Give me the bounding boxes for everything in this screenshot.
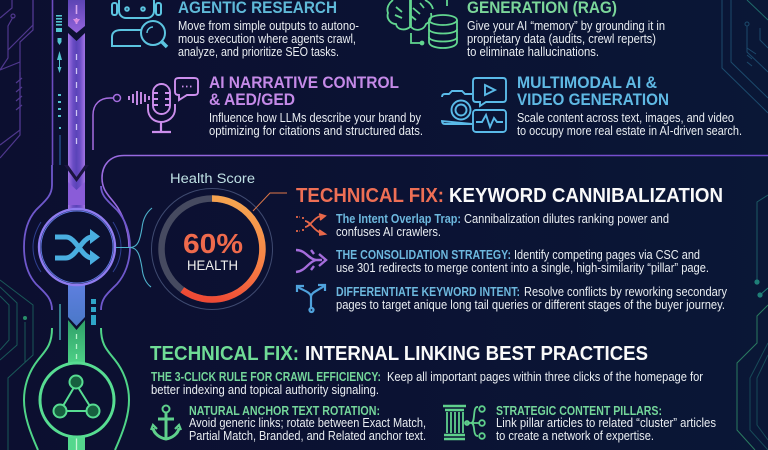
body text xyxy=(178,18,359,59)
circuit traces: upper left xyxy=(0,0,33,158)
heading: VIDEO GENERATION xyxy=(517,91,669,109)
icon: pillar with branches xyxy=(443,406,485,439)
heading: & AED/GED xyxy=(209,91,295,109)
gauge value arc xyxy=(182,198,262,299)
item: consolidation strategy: Identify competing pages via CSC and xyxy=(514,247,700,262)
icon: diverging arrows xyxy=(297,285,325,312)
panel: agentic research xyxy=(112,0,359,59)
heading: AI NARRATIVE CONTROL xyxy=(209,74,399,92)
body text xyxy=(467,18,665,59)
section divider xyxy=(150,329,730,331)
3-click rule: THE 3-CLICK RULE FOR CRAWL EFFICIENCY: xyxy=(151,369,381,384)
3-click rule: better indexing and topical authority signaling. xyxy=(151,382,379,397)
side rail: purple left line xyxy=(52,0,54,165)
item: differentiate intent: Resolve conflicts by reworking secondary xyxy=(524,284,727,299)
chart: health score gauge xyxy=(152,171,272,310)
body text xyxy=(209,110,423,138)
title xyxy=(296,184,723,207)
body text: analyze, and prioritize SEO tasks. xyxy=(178,44,339,59)
connector: gauge to title xyxy=(253,193,287,211)
body text: mous execution where agents crawl, xyxy=(178,31,356,46)
title: KEYWORD CANNIBALIZATION xyxy=(449,184,723,207)
gauge caption: HEALTH xyxy=(187,258,238,273)
body text: proprietary data (audits, crewl reperts) xyxy=(467,31,656,46)
body text: Move from simple outputs to autono- xyxy=(178,18,359,33)
panel: RAG generation xyxy=(387,0,665,59)
icon: camera, video bubble, waveform xyxy=(442,78,506,132)
item: intent overlap trap: Cannibalization dilutes ranking power and xyxy=(464,211,669,226)
heading xyxy=(209,74,399,109)
item: anchor text: NATURAL ANCHOR TEXT ROTATION: xyxy=(189,403,380,418)
gauge label: Health Score xyxy=(170,171,255,186)
node: shuffle capsule xyxy=(24,165,130,310)
body text: Influence how LLMs describe your brand by xyxy=(209,110,421,125)
node circle xyxy=(40,363,114,437)
icon: microphone with sound wave and chat bubble xyxy=(129,78,198,132)
title: INTERNAL LINKING BEST PRACTICES xyxy=(305,342,648,365)
icon: merging arrows xyxy=(296,250,326,272)
item: differentiate intent: DIFFERENTIATE KEYWORD INTENT: xyxy=(336,284,520,299)
pipe: purple upper segment xyxy=(68,0,85,33)
body text xyxy=(517,110,742,138)
item: content pillars xyxy=(443,403,716,443)
circuit traces: upper right xyxy=(722,0,768,113)
icon: robot with magnifier xyxy=(112,0,167,47)
body text: Give your AI “memory” by grounding it in xyxy=(467,18,665,33)
icon: shuffle arrows xyxy=(55,237,93,258)
data pipeline: central track xyxy=(52,0,96,450)
pipe: green segment xyxy=(68,320,85,366)
icon: brain and database xyxy=(387,0,457,48)
purple panel outline xyxy=(102,156,768,247)
item: anchor text: Avoid generic links; rotate between Exact Match, xyxy=(189,415,426,430)
side rail: blue status blocks xyxy=(91,299,96,325)
item: intent overlap trap: The Intent Overlap Trap: xyxy=(336,211,461,226)
icon: crossing arrows xyxy=(296,214,325,235)
panel: AI narrative control xyxy=(93,74,423,150)
3-click rule xyxy=(151,369,704,397)
gauge value: 60% xyxy=(183,228,243,259)
item: intent overlap trap: confuses AI crawlers. xyxy=(336,224,441,239)
circuit traces: lower left xyxy=(0,280,33,450)
connector: node to health ring xyxy=(116,208,152,287)
side rail: status indicators xyxy=(56,15,62,129)
item: consolidation strategy xyxy=(296,247,709,275)
title xyxy=(150,342,648,365)
title: TECHNICAL FIX: xyxy=(150,342,299,365)
icon: triangle network xyxy=(54,376,100,418)
item: consolidation strategy: THE CONSOLIDATION STRATEGY: xyxy=(336,247,511,262)
section: keyword cannibalization xyxy=(296,184,727,312)
connector: pipe to microphone xyxy=(93,94,120,150)
item: differentiate intent xyxy=(297,284,727,312)
panel: multimodal AI xyxy=(442,74,742,138)
body text: to eliminate hallucinations. xyxy=(467,44,599,59)
item: consolidation strategy: use 301 redirects to merge content into a single, high-similarity “pillar” page. xyxy=(336,260,709,275)
item: anchor text: Partial Match, Branded, and Related anchor text. xyxy=(189,428,426,443)
body text: optimizing for citations and structured dats. xyxy=(209,123,423,138)
item: intent overlap trap xyxy=(296,211,669,239)
heading xyxy=(517,74,669,109)
node circle xyxy=(39,209,115,285)
item: content pillars: STRATEGIC CONTENT PILLARS: xyxy=(496,403,662,418)
3-click rule: Keep all important pages within three clicks of the homepage for xyxy=(387,369,704,384)
icon: anchor xyxy=(151,406,181,439)
circuit traces: lower right xyxy=(737,195,768,450)
section: internal linking xyxy=(150,342,716,443)
item: anchor text xyxy=(151,403,426,443)
title: TECHNICAL FIX: xyxy=(296,184,444,207)
node: link network capsule xyxy=(24,328,129,450)
item: content pillars: to create a network of expertise. xyxy=(496,428,654,443)
item: content pillars: Link pillar articles to related “cluster” articles xyxy=(496,415,716,430)
pipe: blue lower segment xyxy=(68,282,85,326)
heading: MULTIMODAL AI & xyxy=(517,74,657,92)
